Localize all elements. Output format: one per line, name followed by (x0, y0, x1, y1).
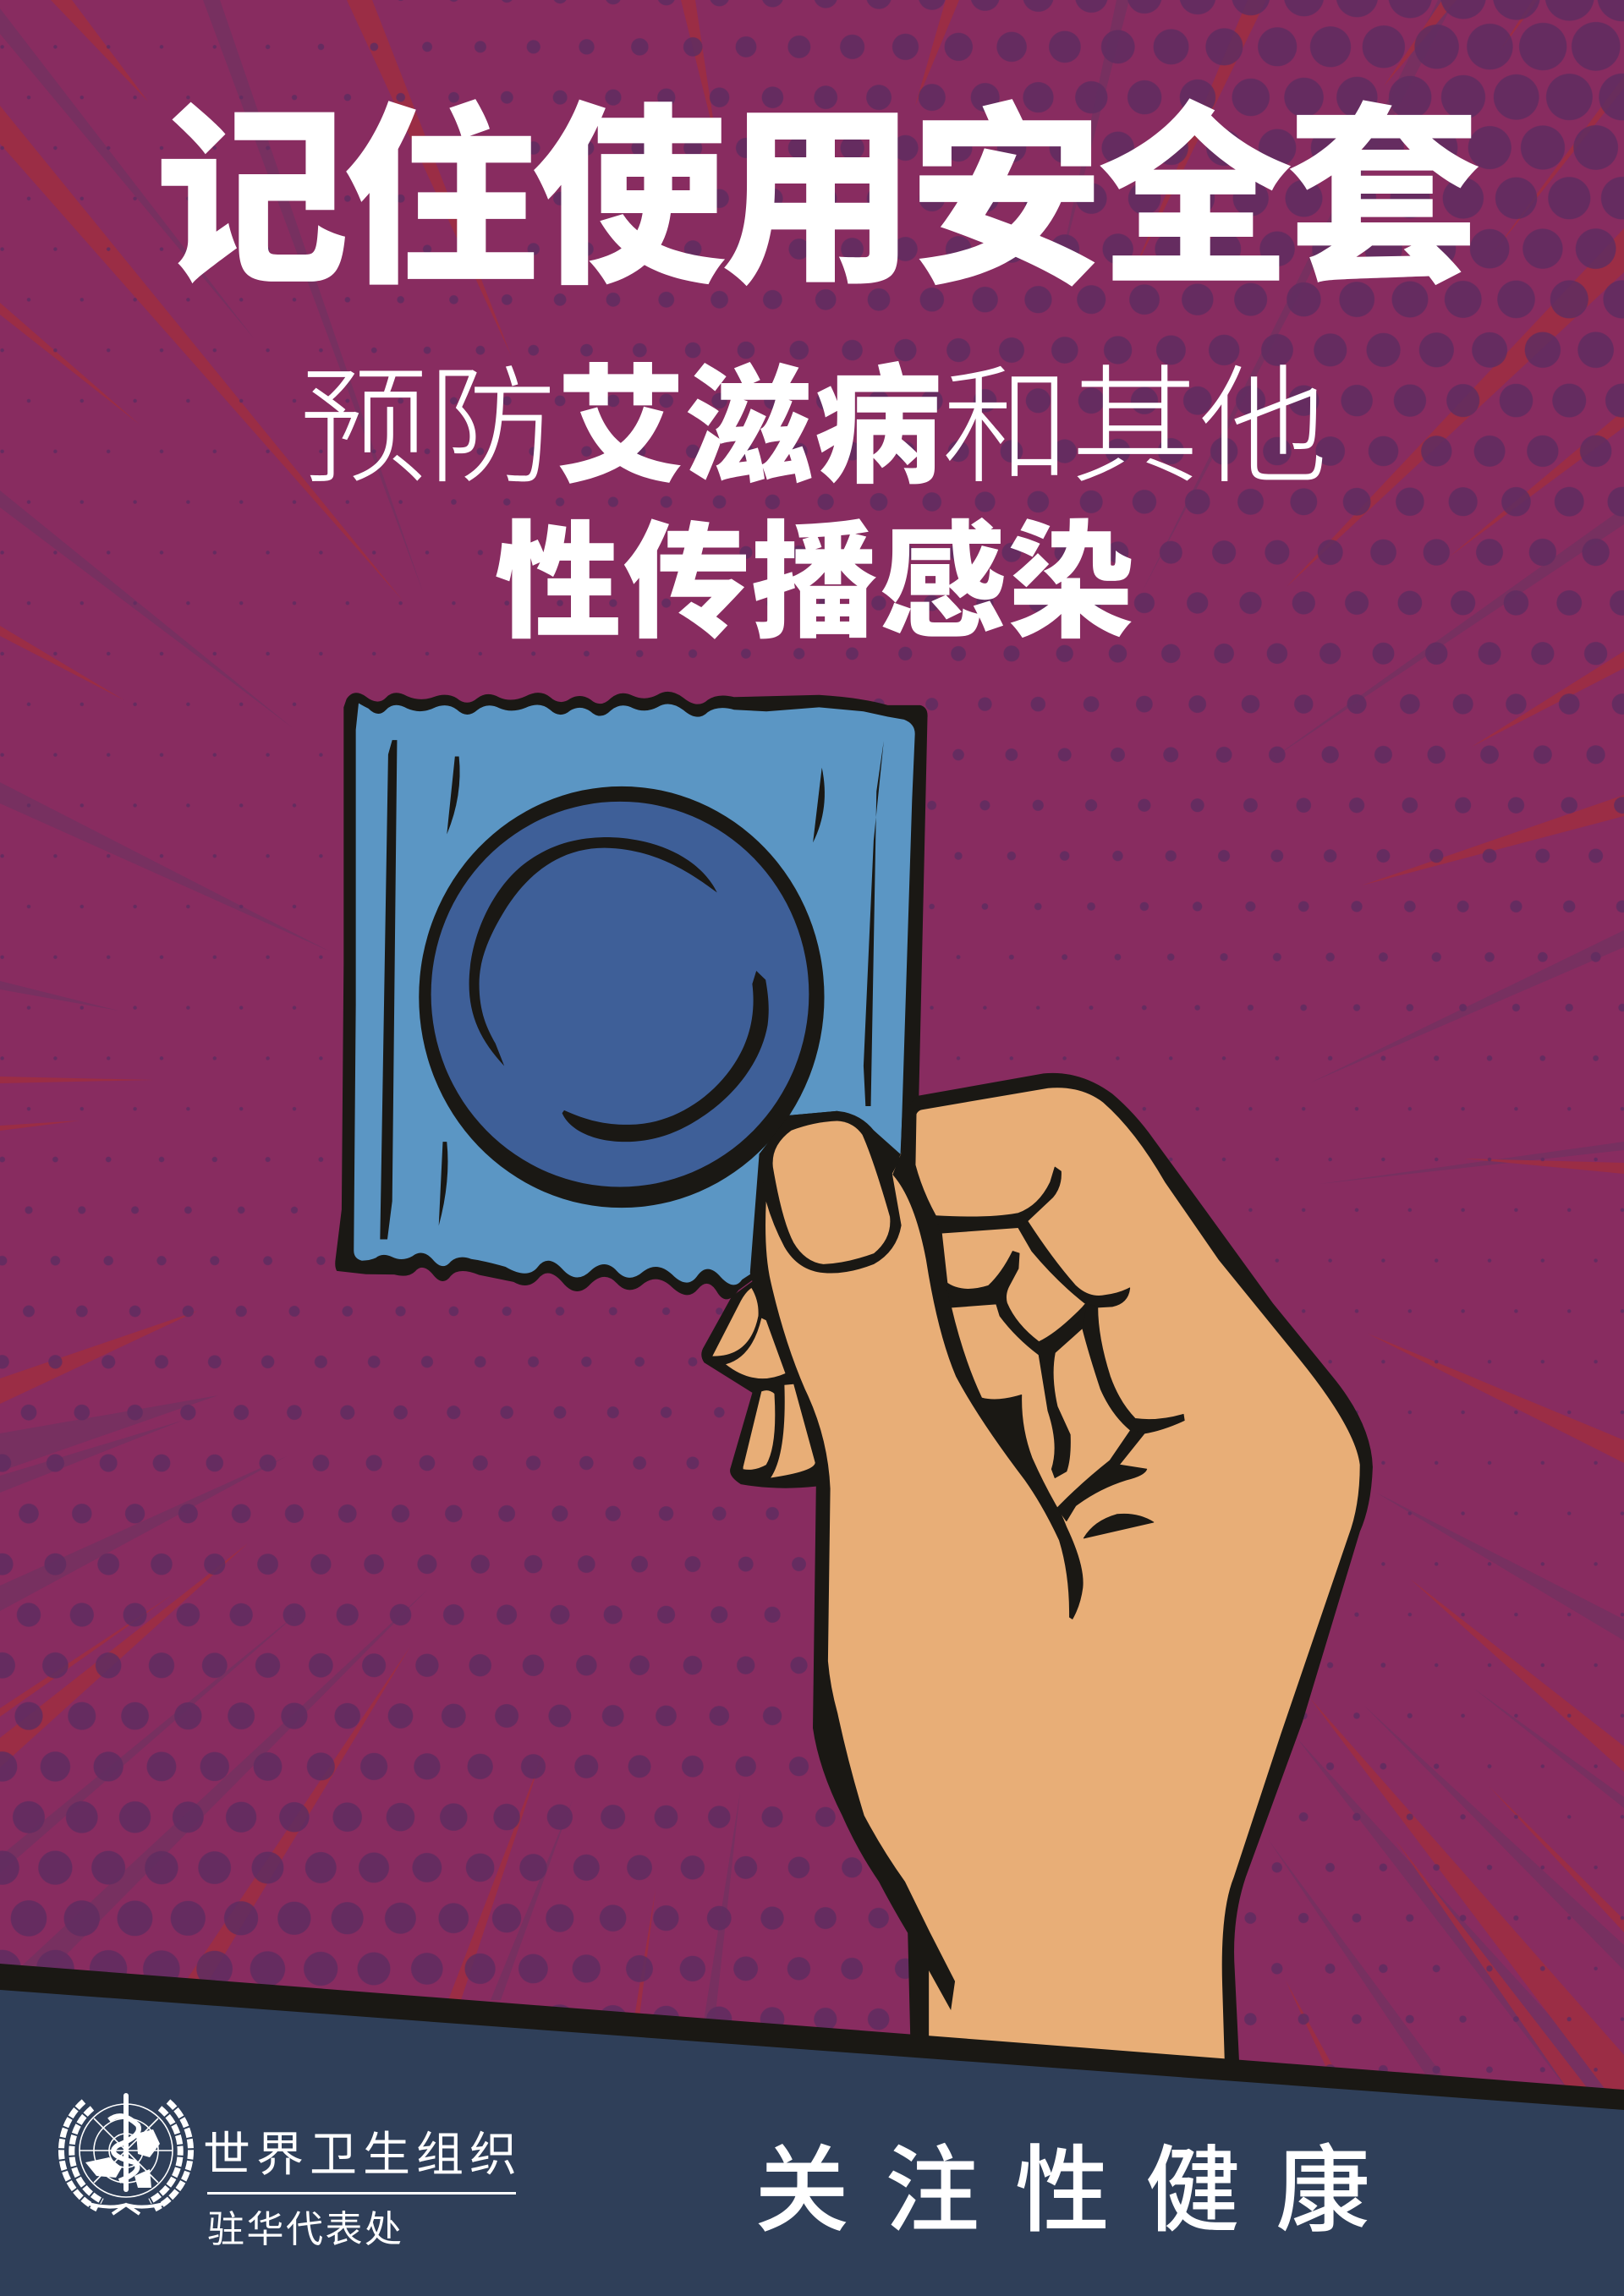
thumb nail (773, 1121, 890, 1264)
hand (701, 1073, 1373, 2064)
ribbon (85, 2203, 167, 2214)
hand skin (765, 1088, 1360, 2061)
hand outline (701, 1073, 1373, 2064)
slogan: 关注性健康 (754, 2138, 1406, 2244)
organisation name: 世界卫生组织 (203, 2128, 523, 2181)
condom inner arcs (469, 837, 769, 1142)
subtitle line 2: 性传播感染 (495, 512, 1136, 654)
snake and staff (109, 2093, 139, 2192)
land masses (85, 2129, 160, 2188)
packet creases (380, 740, 884, 1239)
WHO emblem (61, 2093, 191, 2214)
finger creases (893, 1113, 1184, 1619)
subtitle line 1: 预防艾滋病和其他 (299, 356, 1328, 500)
condom ring outer (419, 786, 825, 1208)
packet outline (335, 692, 928, 1299)
lower fingers (712, 1288, 815, 1477)
packet fill (354, 704, 915, 1285)
title: 记住使用安全套 (155, 90, 1479, 308)
thumb nail surround (760, 1111, 902, 1274)
band black edge (0, 1964, 1624, 2296)
organisation rule (207, 2192, 516, 2195)
condom packet (335, 692, 928, 1299)
band navy fill (0, 1990, 1624, 2296)
office name: 驻华代表处 (207, 2209, 404, 2250)
globe (80, 2104, 173, 2197)
footer band (0, 1964, 1624, 2296)
wreath (61, 2101, 191, 2209)
condom disc (431, 802, 809, 1186)
